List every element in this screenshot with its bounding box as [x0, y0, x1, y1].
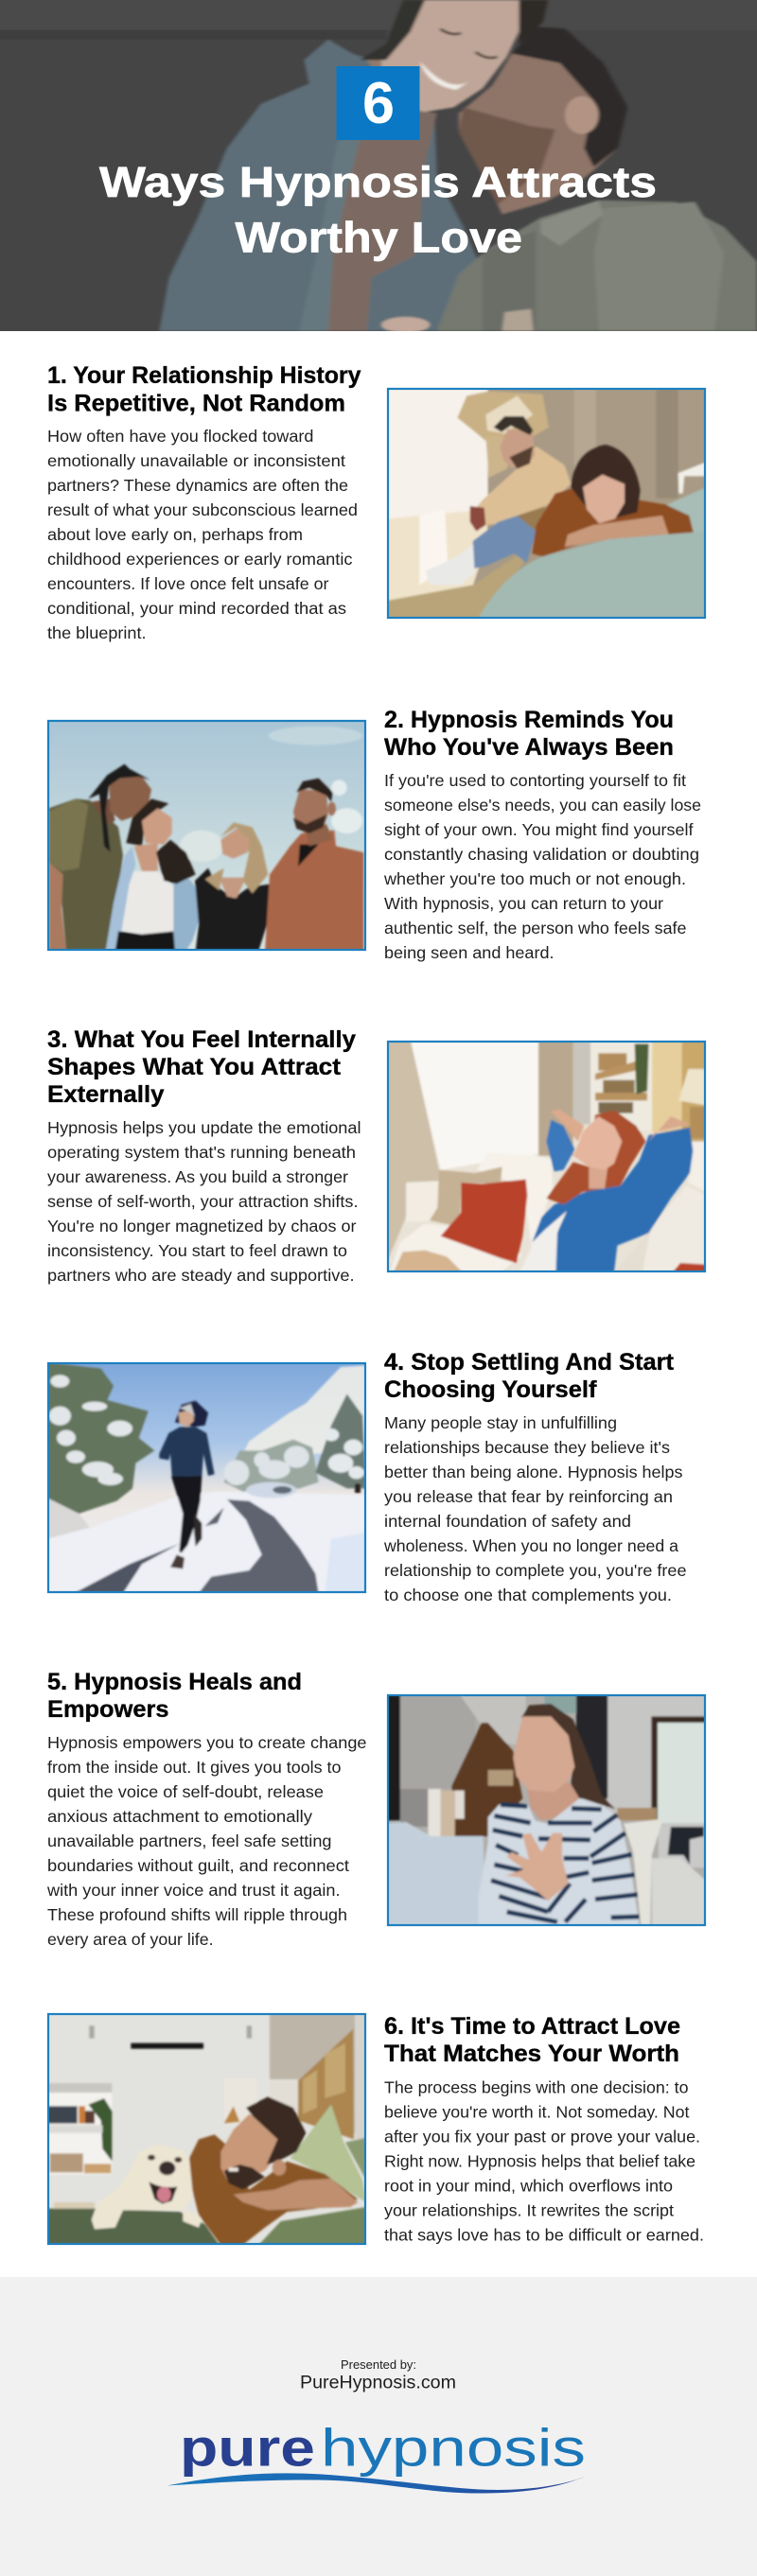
text block: point 2	[383, 771, 701, 962]
text block: point 3: sense of self-worth, your attraction shifts.	[47, 1192, 359, 1211]
text block: point 6: root in your mind, which overflows into	[384, 2176, 673, 2195]
panel: hero header	[0, 0, 757, 333]
photo: woman relaxing on sofa	[387, 1041, 706, 1272]
panel: point 1	[47, 362, 706, 642]
heading: point 3: Externally	[47, 1081, 165, 1108]
text block: point 1: childhood experiences or early romantic	[47, 550, 353, 569]
text block: point 4: relationships because they believe it's	[384, 1438, 670, 1457]
heading: point 4: 4. Stop Settling And Start	[384, 1349, 675, 1376]
number badge: 6	[362, 71, 395, 136]
text block: point 4: better than being alone. Hypnosis helps	[384, 1463, 683, 1481]
photo: couple embracing, darkened	[0, 0, 757, 331]
photo: woman breathing with hand on chest	[387, 1694, 706, 1926]
text block: point 3	[47, 1118, 361, 1285]
text block: point 1	[47, 427, 358, 642]
logo: purehypnosis	[167, 2418, 590, 2494]
text block: point 1: conditional, your mind recorded that as	[47, 599, 346, 618]
panel: point 2	[47, 707, 701, 962]
text block: point 1: encounters. If love once felt unsafe or	[47, 574, 329, 593]
photo: man hugging white dog on green sofa	[47, 2013, 366, 2245]
text block: point 4: wholeness. When you no longer need a	[383, 1536, 678, 1555]
text block: point 6: Right now. Hypnosis helps that belief take	[384, 2151, 695, 2170]
text block: point 1: result of what your subconscious learned	[47, 500, 358, 519]
logo: purehypnosis: hypnosis	[321, 2418, 586, 2478]
heading: point 2: Who You've Always Been	[384, 734, 674, 761]
text block: point 3: inconsistency. You start to feel drawn to	[47, 1241, 347, 1260]
heading: point 1: 1. Your Relationship History	[47, 362, 361, 389]
text block: point 1: emotionally unavailable or inconsistent	[47, 451, 345, 470]
text block: point 4: internal foundation of safety and	[384, 1512, 631, 1531]
photo: couple apart in bedroom	[387, 388, 706, 619]
heading: point 3	[47, 1026, 356, 1108]
text block: point 4: to choose one that complements you.	[384, 1586, 672, 1604]
text block: point 3: Hypnosis helps you update the emotional	[47, 1118, 361, 1137]
text block: point 2: sight of your own. You might find yourself	[384, 820, 694, 839]
text block: point 5: These profound shifts will ripple through	[47, 1905, 347, 1924]
text block: point 3: operating system that's running beneath	[47, 1143, 356, 1162]
text block: point 6: your relationships. It rewrites the script	[384, 2200, 674, 2219]
text block: point 6: that says love has to be difficult or earned.	[384, 2225, 704, 2244]
text block: point 1: partners? These dynamics are often the	[47, 476, 348, 495]
title: Ways Hypnosis Attracts	[99, 158, 657, 206]
text block: point 5: boundaries without guilt, and reconnect	[47, 1856, 349, 1875]
text block: point 1: about love early on, perhaps from	[47, 525, 303, 544]
presented by text	[300, 2357, 456, 2393]
text block: point 5: unavailable partners, feel safe setting	[47, 1831, 331, 1850]
text block: point 6: after you fix your past or prove your value.	[384, 2127, 700, 2146]
heading: point 1	[47, 362, 361, 416]
title: Worthy Love	[235, 214, 522, 261]
heading: point 2: 2. Hypnosis Reminds You	[384, 707, 674, 733]
text block: point 2: whether you're too much or not enough.	[383, 869, 686, 888]
heading: point 5: 5. Hypnosis Heals and	[47, 1669, 302, 1695]
text block: point 4	[383, 1413, 687, 1604]
title	[99, 158, 657, 261]
text block: point 3: your awareness. As you build a stronger	[47, 1167, 348, 1186]
text block: point 4: relationship to complete you, you're free	[384, 1561, 687, 1580]
text block: point 6: believe you're worth it. Not someday. Not	[384, 2102, 690, 2121]
panel: point 4	[47, 1349, 687, 1604]
presented by text: PureHypnosis.com	[300, 2373, 456, 2393]
photo: four friends laughing outdoors	[47, 720, 366, 951]
heading: point 4: Choosing Yourself	[384, 1376, 597, 1403]
text block: point 2: authentic self, the person who feels safe	[384, 919, 687, 938]
heading: point 6: That Matches Your Worth	[384, 2041, 679, 2067]
panel: footer	[0, 2277, 757, 2576]
text block: point 5: anxious attachment to emotionally	[47, 1807, 312, 1826]
text block: point 2: If you're used to contorting yourself to fit	[384, 771, 686, 790]
heading: point 1: Is Repetitive, Not Random	[47, 390, 345, 416]
text block: point 2: With hypnosis, you can return to your	[384, 894, 663, 913]
text block: point 5: with your inner voice and trust it again.	[46, 1881, 341, 1900]
photo: woman running on snowy road	[47, 1362, 366, 1593]
text block: point 3: You're no longer magnetized by chaos or	[47, 1217, 357, 1235]
text block: point 2: being seen and heard.	[384, 943, 555, 962]
text block: point 2: someone else's needs, you can easily lose	[384, 796, 701, 815]
text block: point 5	[46, 1733, 367, 1949]
logo: purehypnosis: pure	[180, 2418, 315, 2478]
heading: point 6	[384, 2013, 680, 2067]
heading: point 6: 6. It's Time to Attract Love	[384, 2013, 680, 2040]
text block: point 5: quiet the voice of self-doubt, release	[47, 1782, 324, 1801]
text block: point 5: from the inside out. It gives you tools to	[47, 1758, 341, 1777]
text block: point 5: every area of your life.	[47, 1930, 214, 1949]
heading: point 3: 3. What You Feel Internally	[47, 1026, 356, 1053]
number badge	[337, 66, 420, 140]
heading: point 3: Shapes What You Attract	[47, 1054, 342, 1080]
panel: point 3	[47, 1026, 706, 1285]
presented by text: Presented by:	[341, 2357, 416, 2372]
heading: point 2	[384, 707, 674, 761]
text block: point 4: Many people stay in unfulfilling	[384, 1413, 617, 1432]
panel: point 5	[46, 1669, 706, 1949]
text block: point 2: constantly chasing validation or doubting	[384, 845, 699, 864]
text block: point 6	[384, 2077, 704, 2244]
text block: point 1: How often have you flocked toward	[47, 427, 314, 446]
text block: point 6: The process begins with one decision: to	[384, 2077, 689, 2096]
text block: point 1: the blueprint.	[47, 623, 146, 642]
panel: point 6	[47, 2013, 704, 2245]
heading: point 5: Empowers	[47, 1696, 168, 1723]
text block: point 4: you release that fear by reinforcing an	[384, 1487, 673, 1506]
text block: point 5: Hypnosis empowers you to create change	[47, 1733, 367, 1752]
heading: point 4	[384, 1349, 675, 1403]
text block: point 3: partners who are steady and supportive.	[47, 1266, 354, 1285]
heading: point 5	[47, 1669, 302, 1723]
